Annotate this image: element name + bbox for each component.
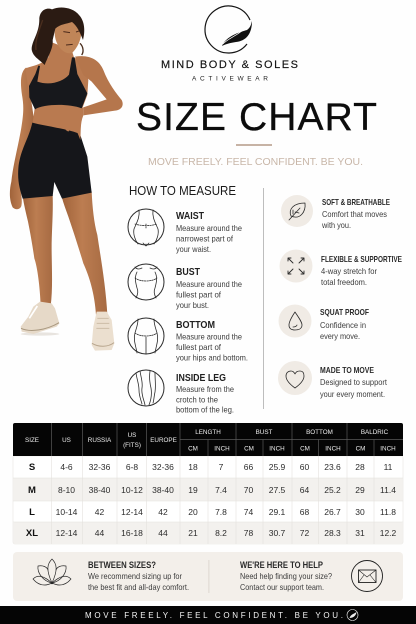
row L: 30 (355, 507, 365, 517)
footer logo (347, 610, 358, 620)
brand logo (161, 6, 298, 83)
row M: 38-40 (89, 485, 111, 495)
feature: flexible and supportive (280, 250, 402, 287)
row M: 11.4 (380, 485, 396, 495)
logo ring (205, 6, 250, 53)
row XL: 21 (188, 528, 198, 538)
squat text (320, 307, 369, 341)
row XL: 28.3 (324, 528, 341, 538)
row S: 28 (355, 462, 365, 472)
row S: 7 (219, 462, 224, 472)
panel divider (208, 560, 210, 593)
footer slogan: MOVE FREELY. FEEL CONFIDENT. BE YOU. (85, 611, 343, 620)
row S (29, 462, 393, 473)
model photo illustration (10, 7, 123, 351)
made to move text (320, 365, 388, 399)
made to move text: your every moment. (320, 389, 385, 399)
inside leg text: Measure from the (176, 384, 234, 394)
item: bust (128, 264, 242, 310)
squat text: Confidence in (320, 320, 366, 330)
right shoe (92, 312, 114, 351)
row L: 20 (188, 507, 198, 517)
row M: 10-12 (121, 485, 143, 495)
row M: 8-10 (58, 485, 75, 495)
row L: 29.1 (269, 507, 286, 517)
table header: EUROPE (150, 437, 177, 444)
row M: 25.2 (324, 485, 341, 495)
icon: bust (128, 264, 164, 300)
table header: INCH (380, 446, 396, 452)
between sizes text: BETWEEN SIZES? (88, 560, 156, 570)
table header: (FITS) (123, 442, 141, 449)
row XL: 72 (300, 528, 309, 538)
inside leg text: crotch to the (176, 394, 218, 404)
neck and torso (25, 42, 88, 137)
row XL: 12.2 (380, 528, 397, 538)
row M: 7.4 (215, 485, 227, 495)
bottom text: BOTTOM (176, 320, 215, 331)
row L: 42 (158, 507, 168, 517)
hand on hip (66, 107, 83, 140)
table header (13, 423, 403, 456)
row M: 70 (244, 485, 253, 495)
between sizes text (88, 560, 189, 592)
table header: INCH (325, 446, 341, 452)
bottom text: your hips and bottom. (176, 352, 248, 362)
row S: 6-8 (126, 462, 138, 472)
bust text: Measure around the (176, 279, 242, 289)
brand name: MIND BODY & SOLES (161, 59, 298, 71)
left shoe (21, 302, 59, 334)
row L: 26.7 (324, 507, 341, 517)
help text: WE'RE HERE TO HELP (240, 560, 323, 570)
row XL: 12-14 (56, 528, 78, 538)
row S: 32-36 (152, 462, 174, 472)
inside leg text (176, 373, 234, 414)
icon: four-way arrows (280, 250, 312, 282)
icon: waist (128, 209, 164, 246)
shorts (18, 123, 92, 199)
between sizes text: We recommend sizing up for (88, 571, 182, 581)
icon: lotus (33, 559, 71, 585)
waist text: narrowest part of (176, 234, 234, 244)
row S: 11 (384, 462, 393, 472)
panel: how to measure (128, 184, 248, 414)
table header: RUSSIA (88, 437, 112, 444)
icon: envelope (352, 560, 382, 592)
row L: L (29, 507, 35, 518)
row L: 11.8 (380, 507, 396, 517)
bust text (176, 267, 242, 310)
table header: CM (188, 446, 198, 452)
hair (32, 7, 84, 65)
left arm (10, 68, 35, 209)
row L: 7.8 (215, 507, 227, 517)
inside leg text: INSIDE LEG (176, 373, 226, 384)
made to move text: MADE TO MOVE (320, 365, 374, 375)
waist text: your waist. (176, 244, 211, 254)
row S: 23.6 (324, 462, 341, 472)
icon: heart (278, 361, 312, 395)
table header: CM (300, 446, 310, 452)
row S: 25.9 (269, 462, 286, 472)
panel: help and sizing advice (13, 552, 403, 601)
help text: Contact our support team. (240, 582, 324, 592)
row M (28, 485, 396, 496)
squat text: SQUAT PROOF (320, 307, 369, 317)
row L (29, 507, 396, 518)
row XL (26, 528, 397, 539)
row M: M (28, 485, 36, 496)
row M: 27.5 (269, 485, 286, 495)
facial features (63, 31, 80, 45)
feature: made to move (278, 361, 388, 399)
inside leg text: bottom of the leg. (176, 404, 234, 414)
table header: BOTTOM (306, 429, 333, 436)
waist text (176, 211, 242, 254)
row XL: 8.2 (215, 528, 227, 538)
panel background (13, 552, 403, 601)
footer bar (0, 606, 416, 624)
row S: 66 (244, 462, 253, 472)
item: inside leg (128, 370, 234, 414)
feature: squat proof (278, 304, 369, 341)
left leg (23, 195, 53, 306)
soft text (321, 197, 390, 230)
row M: 29 (355, 485, 365, 495)
table header: BALDRIC (361, 429, 389, 436)
title underline (236, 144, 272, 146)
row XL: 30.7 (269, 528, 286, 538)
soft text: with you. (321, 220, 351, 230)
row L: 74 (244, 507, 253, 517)
right leg (62, 192, 107, 315)
flexible text (321, 254, 402, 287)
made to move text: Designed to support (320, 377, 388, 387)
title: SIZE CHART (136, 96, 377, 139)
row M: 19 (188, 485, 198, 495)
squat text: every move. (320, 331, 360, 341)
bottom text: Measure around the (176, 332, 242, 342)
icon: leaf (281, 195, 313, 227)
row XL: 31 (355, 528, 365, 538)
logo leaf (222, 21, 252, 46)
bust text: your bust. (176, 300, 209, 310)
right arm (75, 56, 123, 115)
item: bottom (128, 318, 248, 362)
table header: US (62, 437, 71, 444)
row L: 68 (300, 507, 309, 517)
row XL: 78 (244, 528, 253, 538)
table body (13, 456, 403, 544)
item: waist (128, 209, 242, 254)
table header: CM (356, 446, 365, 452)
feature: soft and breathable (281, 195, 390, 230)
bust text: fullest part of (176, 290, 222, 300)
size table (13, 423, 403, 544)
bottom text (176, 320, 248, 362)
help text (240, 560, 332, 592)
heading: HOW TO MEASURE (129, 184, 236, 198)
sports bra (29, 57, 87, 109)
waist text: WAIST (176, 211, 204, 222)
flexible text: 4-way stretch for (321, 266, 377, 276)
row XL: 16-18 (121, 528, 143, 538)
table header: SIZE (25, 437, 39, 444)
brand subline: ACTIVEWEAR (192, 76, 268, 82)
bust text: BUST (176, 267, 200, 278)
icon: water drop (278, 304, 312, 338)
between sizes text: the best fit and all-day comfort. (88, 582, 189, 592)
row L: 42 (95, 507, 104, 517)
table header: US (128, 432, 136, 439)
icon: inside leg (128, 370, 164, 406)
row S: 60 (300, 462, 309, 472)
table header: INCH (269, 446, 285, 452)
flexible text: total freedom. (321, 277, 367, 287)
row M: 64 (300, 485, 309, 495)
icon: bottom (128, 318, 164, 354)
table header: LENGTH (195, 429, 221, 436)
table header: INCH (214, 446, 230, 452)
waist text: Measure around the (176, 223, 242, 233)
bottom text: fullest part of (176, 342, 222, 352)
row L: 12-14 (121, 507, 143, 517)
row S: 4-6 (60, 462, 73, 472)
row S: 18 (188, 462, 198, 472)
row XL: XL (26, 528, 38, 539)
row XL: 44 (158, 528, 168, 538)
panel: features (278, 195, 402, 399)
table header: CM (244, 446, 254, 452)
tagline: MOVE FREELY. FEEL CONFIDENT. BE YOU. (148, 156, 363, 168)
soft text: Comfort that moves (322, 209, 387, 219)
column divider (263, 188, 264, 409)
row S: S (29, 462, 35, 473)
row XL: 44 (95, 528, 104, 538)
row M: 38-40 (152, 485, 174, 495)
soft text: SOFT & BREATHABLE (322, 197, 390, 207)
face (55, 22, 81, 53)
row L: 10-14 (56, 507, 78, 517)
table header: BUST (256, 429, 273, 436)
help text: Need help finding your size? (240, 571, 332, 581)
row S: 32-36 (89, 462, 111, 472)
shoe shadows (21, 332, 59, 336)
